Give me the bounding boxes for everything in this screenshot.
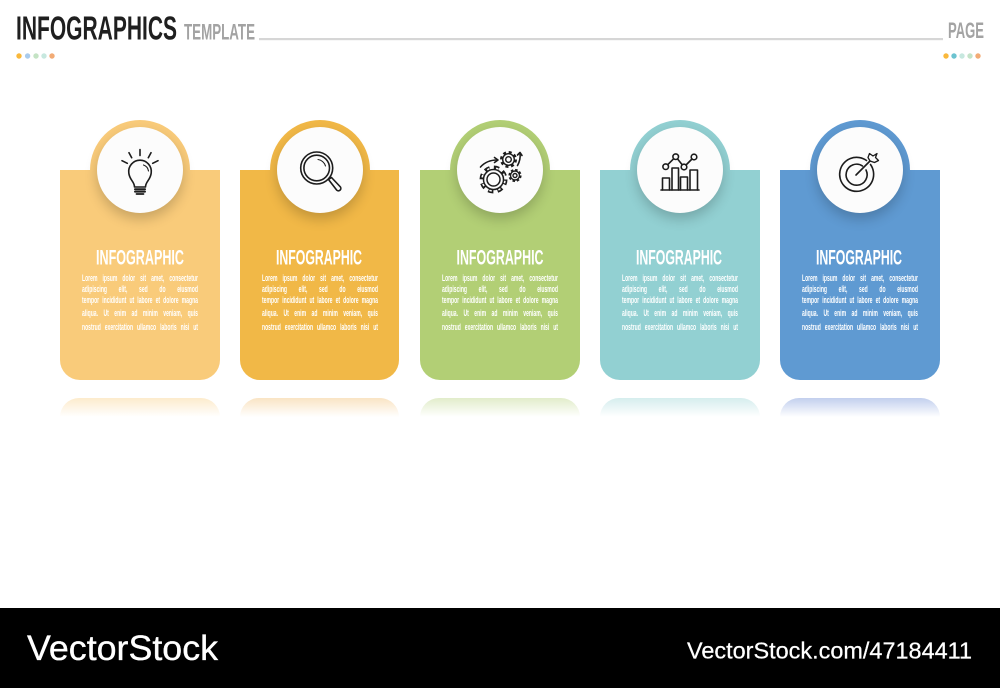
footer url: VectorStock.com/47184411 (687, 638, 972, 664)
panel: card 1 (60, 120, 220, 380)
text block: tempor incididunt ut labore et dolore magna (622, 295, 738, 306)
text block: nostrud exercitation ullamco laboris nisi ut (262, 322, 378, 333)
icon: light bulb (121, 148, 159, 195)
reflection 5 (780, 398, 940, 417)
ring (630, 120, 730, 220)
ring (270, 120, 370, 220)
text block: tempor incididunt ut labore et dolore magna (82, 295, 198, 306)
text block: Lorem ipsum dolor sit amet, consectetur (802, 273, 918, 284)
panel: card 3 (420, 120, 580, 380)
text block: nostrud exercitation ullamco laboris nisi ut (622, 322, 738, 333)
text block: aliqua. Ut enim ad minim veniam, quis (802, 308, 918, 319)
text block: aliqua. Ut enim ad minim veniam, quis (622, 308, 738, 319)
text block: aliqua. Ut enim ad minim veniam, quis (442, 308, 558, 319)
reflection 4 (600, 398, 760, 417)
title: INFOGRAPHICS (16, 10, 177, 46)
text block: nostrud exercitation ullamco laboris nisi ut (82, 322, 198, 333)
icon: magnifier (300, 151, 342, 192)
ring (450, 120, 550, 220)
text block (442, 273, 558, 333)
ring (810, 120, 910, 220)
text block: Lorem ipsum dolor sit amet, consectetur (262, 273, 378, 284)
white disc (97, 127, 183, 213)
ring (90, 120, 190, 220)
white disc (457, 127, 543, 213)
text block: nostrud exercitation ullamco laboris nisi ut (442, 322, 558, 333)
left dots (16, 53, 55, 59)
white disc (637, 127, 723, 213)
icon: chart (660, 153, 700, 191)
text block (82, 273, 198, 333)
text block: Lorem ipsum dolor sit amet, consectetur (82, 273, 198, 284)
reflection 2 (240, 398, 399, 417)
text block (622, 273, 738, 333)
text block: tempor incididunt ut labore et dolore magna (802, 295, 918, 306)
icon: target (838, 152, 880, 192)
text block: tempor incididunt ut labore et dolore magna (262, 295, 378, 306)
text block: aliqua. Ut enim ad minim veniam, quis (262, 308, 378, 319)
card body (600, 170, 760, 380)
card body (60, 170, 220, 380)
text block: nostrud exercitation ullamco laboris nisi ut (802, 322, 918, 333)
text block: adipiscing elit, sed do eiusmod (82, 284, 198, 295)
text block (262, 273, 378, 333)
text block: adipiscing elit, sed do eiusmod (622, 284, 738, 295)
text block: Lorem ipsum dolor sit amet, consectetur (622, 273, 738, 284)
white disc (817, 127, 903, 213)
text block (802, 273, 918, 333)
text block: adipiscing elit, sed do eiusmod (802, 284, 918, 295)
text block: tempor incididunt ut labore et dolore magna (442, 295, 558, 306)
text block: adipiscing elit, sed do eiusmod (442, 284, 558, 295)
panel: card 2 (240, 120, 399, 380)
panel: card 5 (780, 120, 940, 380)
footer brand: VectorStock (27, 629, 219, 668)
reflection 1 (60, 398, 220, 417)
panel: card 4 (600, 120, 760, 380)
header rule (259, 38, 943, 40)
text block: adipiscing elit, sed do eiusmod (262, 284, 378, 295)
text block: aliqua. Ut enim ad minim veniam, quis (82, 308, 198, 319)
header (16, 10, 984, 59)
white disc (277, 127, 363, 213)
card body (240, 170, 399, 380)
subtitle: TEMPLATE (184, 20, 255, 44)
right dots (943, 53, 981, 59)
footer bar (0, 608, 1000, 688)
text block: Lorem ipsum dolor sit amet, consectetur (442, 273, 558, 284)
card body (780, 170, 940, 380)
card body (420, 170, 580, 380)
reflection 3 (420, 398, 580, 417)
icon: gears (480, 151, 523, 194)
